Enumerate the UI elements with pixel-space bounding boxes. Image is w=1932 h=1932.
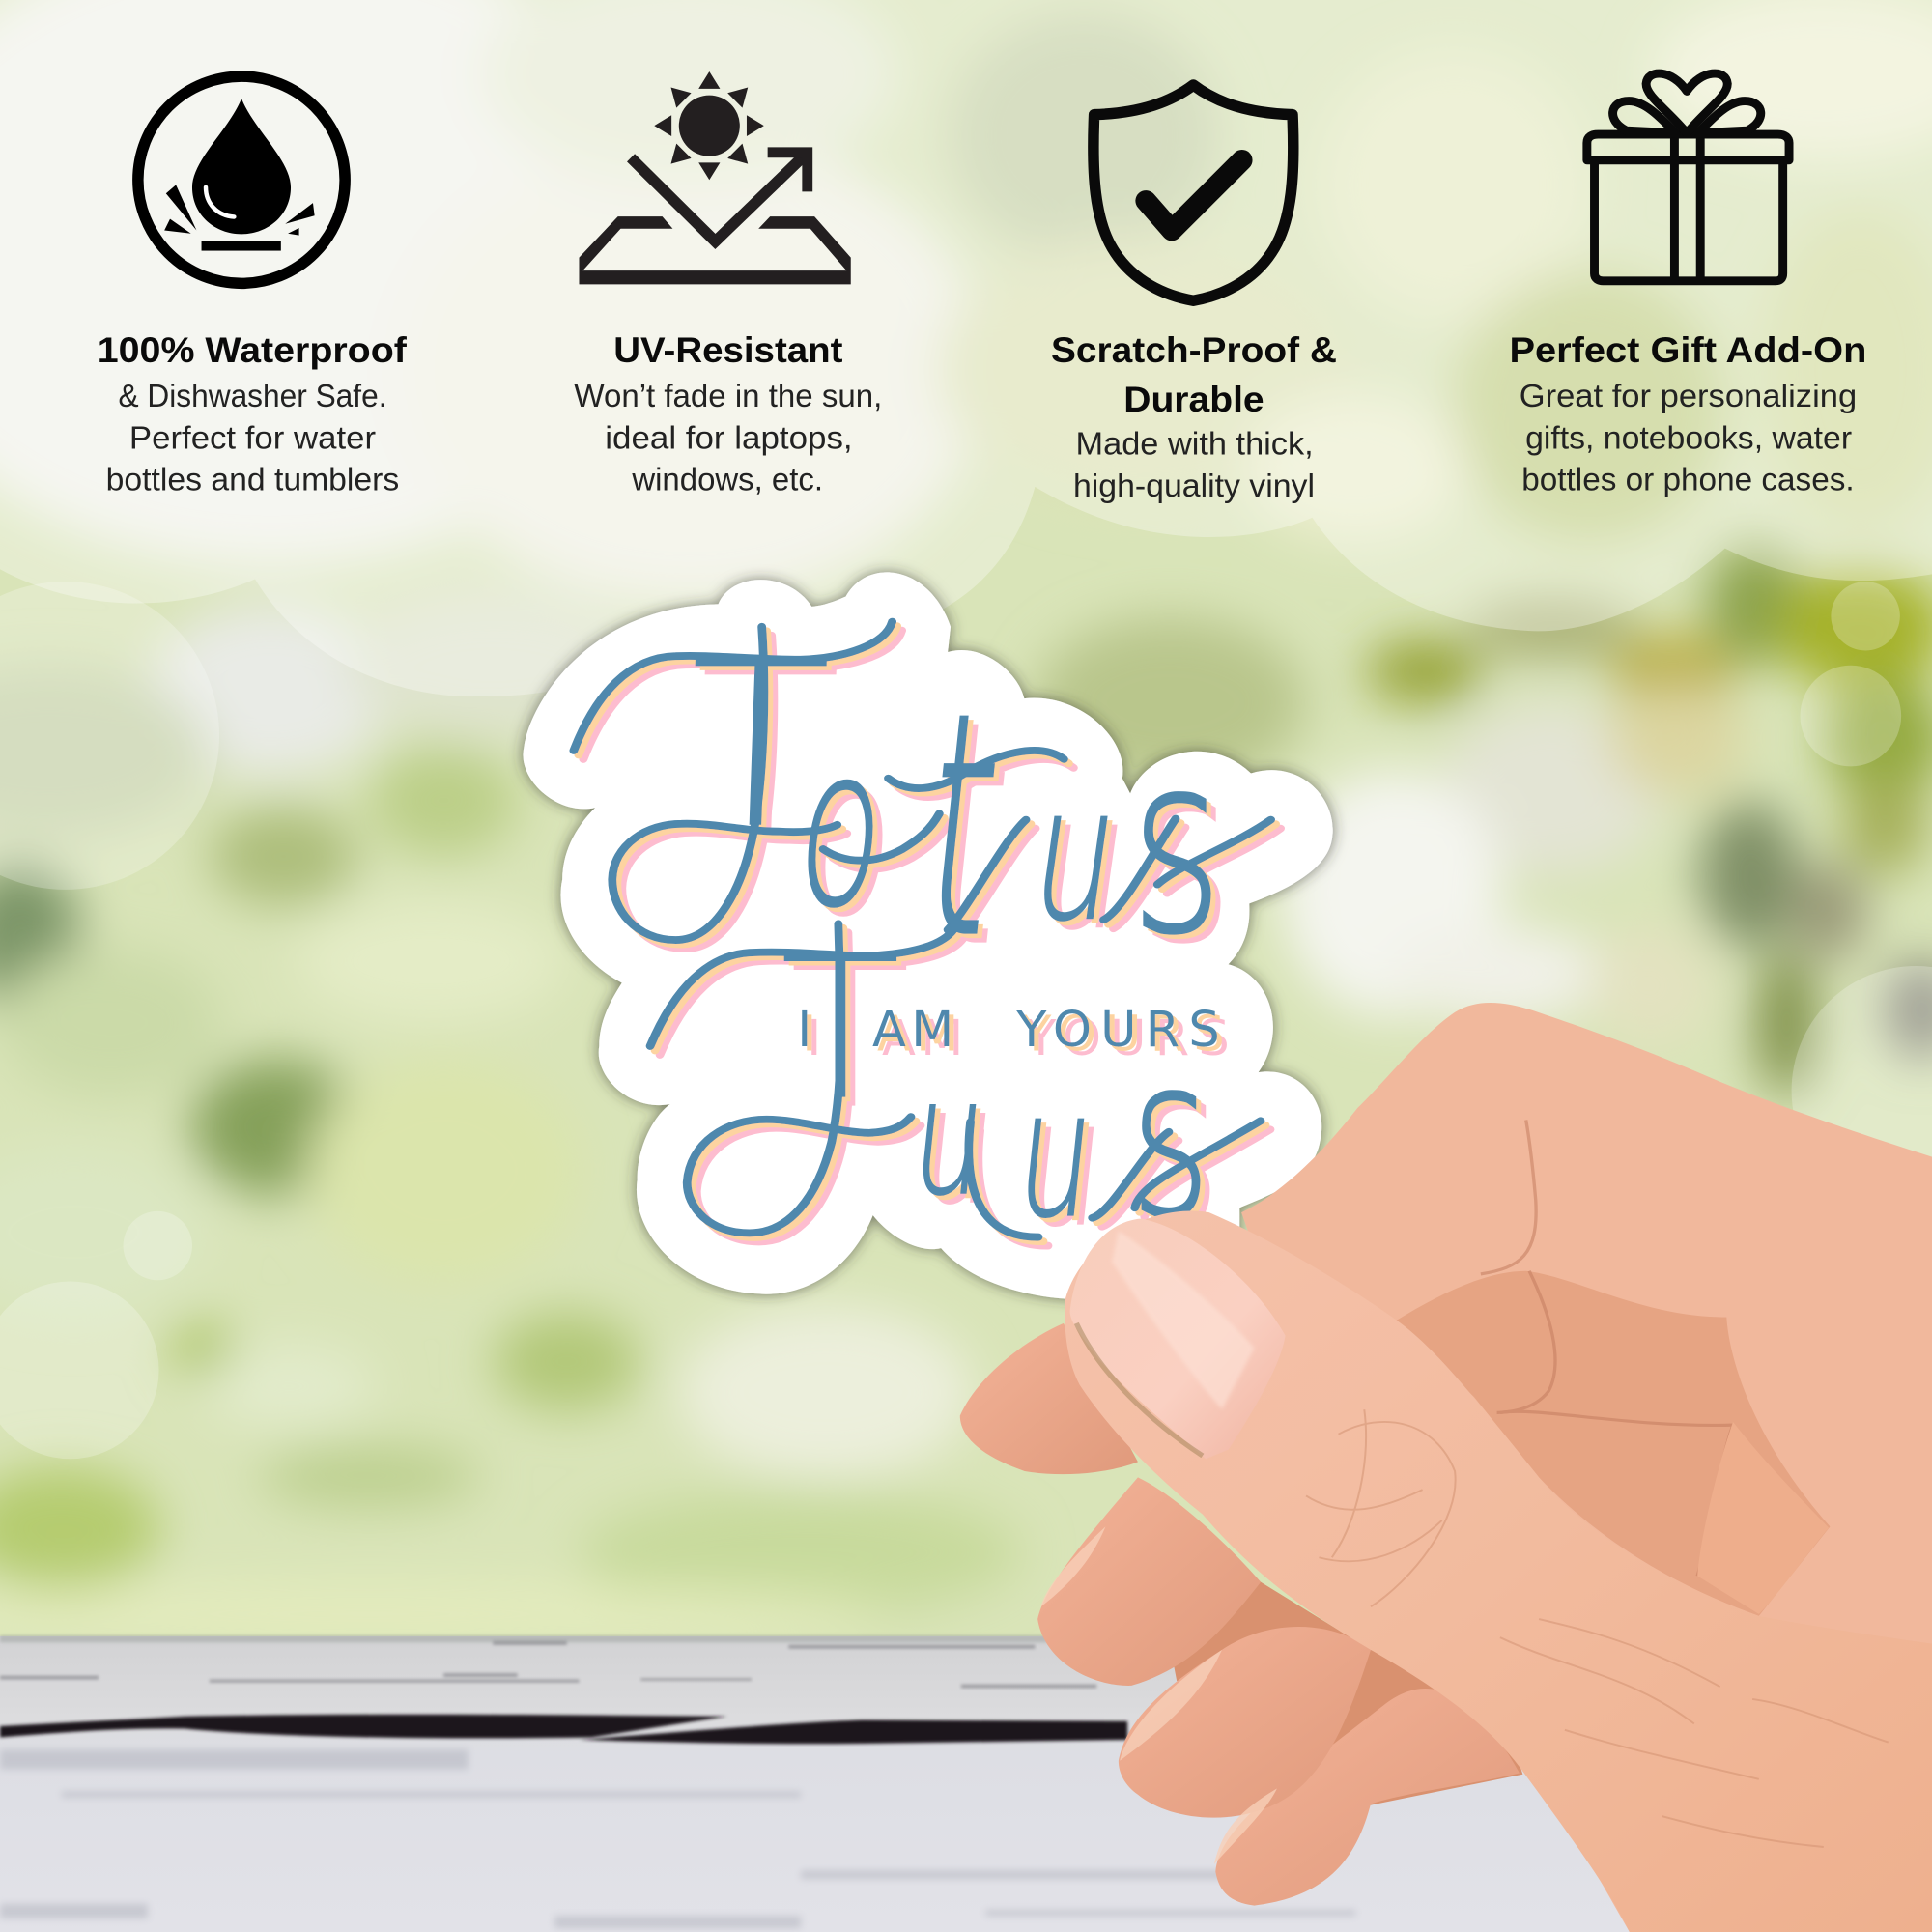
back of hand — [1241, 1003, 1932, 1932]
text: uv resistant: Won’t fade in the sun, — [574, 379, 882, 414]
word: Tuus: s — [1130, 1011, 1210, 1266]
thumbnail — [1070, 1218, 1286, 1459]
text: scratch proof — [1051, 330, 1337, 504]
decorative bubbles — [0, 582, 1932, 1459]
text: gift add-on: Great for personalizing — [1520, 379, 1857, 414]
word: Totus: t — [910, 646, 1014, 1006]
pinky finger — [1215, 1689, 1520, 1906]
text: waterproof: Perfect for water — [129, 420, 376, 456]
nail highlight — [1112, 1231, 1254, 1409]
knuckle wrinkles — [1306, 1409, 1889, 1847]
curled finger segment — [1697, 1422, 1829, 1614]
inner finger folds — [1481, 1120, 1733, 1576]
flourishes: swashes and loops — [574, 622, 1271, 1237]
word: Tuus: u — [1009, 1054, 1103, 1257]
word: Tuus: T — [781, 915, 900, 1144]
icon: shield with check — [1094, 85, 1293, 300]
text: scratch proof: Durable — [1123, 380, 1264, 419]
index finger tip — [960, 1323, 1138, 1474]
icon: gift box with heart bow — [1587, 73, 1789, 281]
text: scratch proof: Scratch-Proof & — [1051, 330, 1337, 370]
icon: water drop in circle — [138, 76, 345, 283]
middle finger — [1037, 1477, 1261, 1686]
text: waterproof: 100% Waterproof — [98, 330, 408, 370]
translucent cloud overlay — [0, 0, 1932, 696]
fingernail slivers — [1040, 1526, 1277, 1864]
word: Totus: T — [683, 611, 833, 879]
text: gift add-on: bottles or phone cases. — [1521, 463, 1855, 498]
wooden table — [0, 1635, 1932, 1932]
hand holding sticker — [960, 1003, 1932, 1932]
ring finger — [1119, 1627, 1371, 1818]
text: uv resistant: ideal for laptops, — [605, 420, 853, 456]
word: Totus: s — [1130, 703, 1223, 989]
text: scratch proof: Made with thick, — [1076, 427, 1314, 463]
text: uv resistant: UV-Resistant — [613, 330, 842, 370]
palm shadow interior — [1397, 1271, 1830, 1616]
words: I am yours: AM — [872, 1002, 953, 1059]
text: gift add-on: Perfect Gift Add-On — [1509, 330, 1866, 370]
text: waterproof: bottles and tumblers — [106, 463, 399, 498]
text: gift add-on: gifts, notebooks, water — [1525, 420, 1852, 456]
text: scratch proof: high-quality vinyl — [1073, 469, 1315, 504]
text: waterproof: & Dishwasher Safe. — [118, 379, 387, 414]
word: Tuus: u — [905, 1044, 994, 1231]
word: Totus: u — [1021, 747, 1131, 962]
word: Totus — [683, 611, 1223, 1006]
text: uv resistant — [574, 330, 882, 498]
words: I am yours: I — [797, 1002, 811, 1059]
sticker lettering: Totus I am yours Tuus — [574, 611, 1271, 1266]
thumb — [1065, 1211, 1932, 1932]
hidden finger bases under thumb — [1138, 1477, 1522, 1805]
words: I am yours: YOURS — [1015, 1002, 1220, 1059]
word: Totus: o — [787, 699, 897, 955]
text: gift add-on — [1509, 330, 1866, 498]
text: waterproof — [98, 330, 408, 498]
word: Tuus — [781, 915, 1210, 1266]
sticker die-cut base — [523, 572, 1333, 1299]
icon: sun and reflected arrow — [579, 71, 851, 284]
text: uv resistant: windows, etc. — [631, 463, 823, 498]
